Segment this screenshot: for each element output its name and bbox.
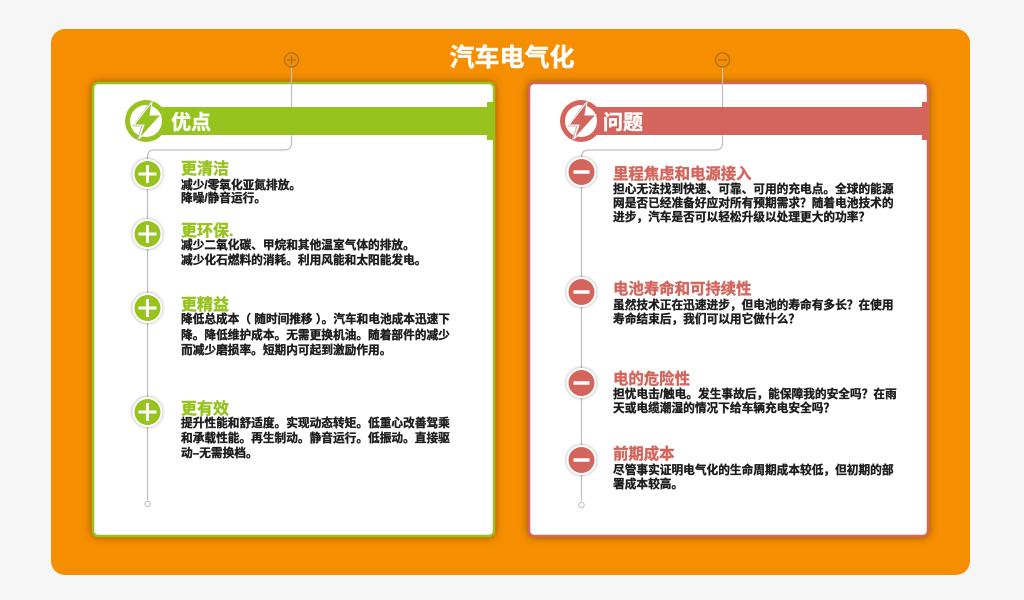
- text: leaner: 降低总成本（ 随时间推移 ）。汽车和电池成本迅速下: [181, 312, 450, 326]
- heading: cleaner: 更清洁: [181, 159, 229, 178]
- icon: minus: [566, 368, 596, 398]
- text: cleaner: [181, 178, 301, 205]
- text: upfront cost: [613, 463, 894, 491]
- panel: issues: [529, 53, 928, 536]
- item: leaner: [132, 293, 450, 357]
- heading: upfront cost: 前期成本: [613, 444, 675, 463]
- icon: plus: [132, 219, 162, 249]
- text: leaner: 而减少磨损率。短期内可起到激励作用。: [181, 343, 391, 357]
- end dot: advantages: [145, 501, 150, 507]
- text: upfront cost: 尽管事实证明电气化的生命周期成本较低，但初期的部: [613, 463, 894, 477]
- icon: minus: [566, 277, 596, 307]
- connector line: advantages: [148, 67, 292, 500]
- text: greener: 减少二氧化碳、甲烷和其他温室气体的排放。: [181, 238, 415, 252]
- text: more efficient: [181, 416, 450, 460]
- heading: electrical hazard: 电的危险性: [613, 369, 690, 388]
- banner: advantages: [125, 100, 493, 142]
- text: range anxiety: 进步，汽车是否可以轻松升级以处理更大的功率？: [613, 210, 870, 224]
- item: range anxiety: [566, 157, 894, 224]
- panel: advantages: [93, 53, 494, 536]
- item: more efficient: [132, 397, 450, 460]
- text: electrical hazard: [613, 387, 897, 415]
- text: range anxiety: 网是否已经准备好应对所有预期需求？随着电池技术的: [613, 196, 894, 210]
- heading: range anxiety: 里程焦虑和电源接入: [613, 164, 752, 183]
- text: more efficient: 提升性能和舒适度。实现动态转矩。低重心改善驾乘: [181, 416, 450, 430]
- text: greener: 减少化石燃料的消耗。利用风能和太阳能发电。: [181, 253, 426, 267]
- text: range anxiety: [613, 182, 894, 224]
- banner: issues: [560, 100, 928, 142]
- item: battery life: [566, 277, 894, 326]
- text: leaner: 降。降低维护成本。无需更换机油。随着部件的减少: [181, 328, 450, 342]
- heading: leaner: 更精益: [181, 295, 229, 314]
- icon: lightning bolt: [568, 102, 596, 140]
- item: electrical hazard: [566, 368, 897, 415]
- text: battery life: 寿命结束后，我们可以用它做什么？: [613, 312, 800, 326]
- item: cleaner: [132, 159, 301, 205]
- text: cleaner: 降噪/静音运行。: [181, 191, 266, 205]
- title: 汽车电气化: [449, 44, 575, 72]
- item: greener: [132, 219, 426, 267]
- heading: more efficient: 更有效: [181, 399, 229, 418]
- text: more efficient: 动–无需换档。: [181, 446, 258, 460]
- heading: advantages: 优点: [171, 111, 211, 134]
- end dot: issues: [579, 502, 584, 508]
- icon: plus: [132, 159, 162, 189]
- icon: plus: [132, 397, 162, 427]
- text: electrical hazard: 天或电缆潮湿的情况下给车辆充电安全吗？: [613, 401, 835, 415]
- item: upfront cost: [566, 444, 894, 491]
- icon: top minus: [716, 53, 730, 67]
- heading: issues: 问题: [603, 111, 643, 134]
- text: leaner: [181, 312, 450, 357]
- connector line: issues: [582, 67, 722, 501]
- heading: battery life: 电池寿命和可持续性: [613, 279, 752, 298]
- text: battery life: [613, 298, 894, 326]
- text: upfront cost: 署成本较高。: [613, 477, 683, 491]
- text: electrical hazard: 担忧电击/触电。发生事故后，能保障我的安全吗？在雨: [613, 387, 897, 401]
- text: battery life: 虽然技术正在迅速进步，但电池的寿命有多长？在使用: [613, 298, 894, 312]
- text: more efficient: 和承载性能。再生制动。静音运行。低振动。直接驱: [181, 431, 450, 445]
- heading: greener: 更环保.: [181, 222, 233, 240]
- icon: minus: [566, 445, 596, 475]
- icon: plus: [132, 293, 162, 323]
- text: range anxiety: 担心无法找到快速、可靠、可用的充电点。全球的能源: [613, 182, 894, 196]
- icon: minus: [566, 157, 596, 187]
- text: cleaner: 减少/零氧化亚氮排放。: [181, 178, 301, 192]
- icon: lightning bolt: [133, 102, 161, 140]
- text: greener: [181, 238, 426, 267]
- icon: top plus: [284, 53, 298, 67]
